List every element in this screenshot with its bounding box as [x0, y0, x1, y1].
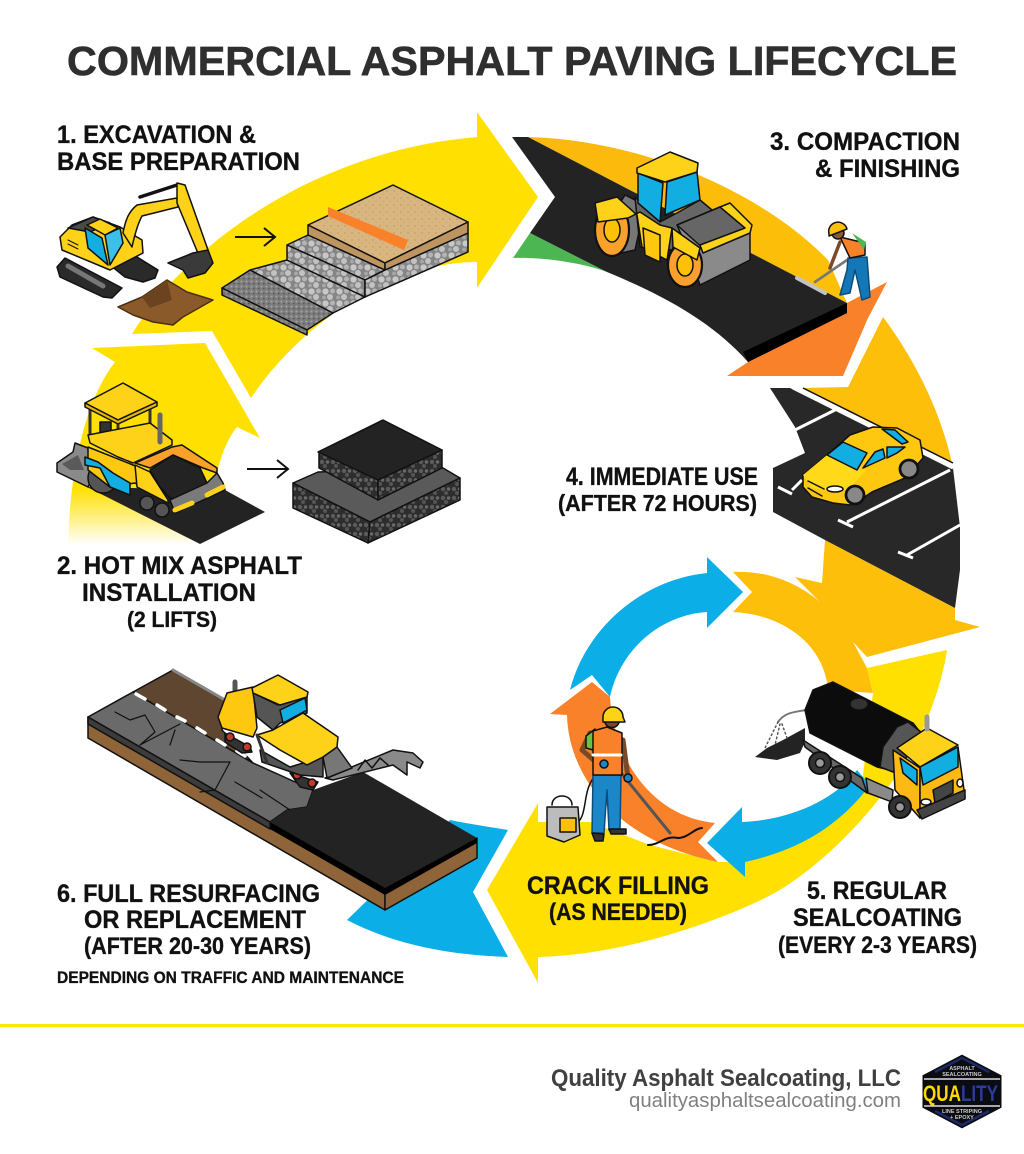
milling conveyor [325, 750, 423, 780]
label: crack filling [527, 872, 709, 926]
title: COMMERCIAL ASPHALT PAVING LIFECYCLE [67, 38, 957, 84]
icon: asphalt paver [57, 383, 265, 544]
label: crack filling: CRACK FILLING [527, 872, 709, 900]
arrow: step 2 yellow [68, 343, 260, 545]
logo: Quality badge: + EPOXY [950, 1115, 974, 1121]
footer: website: qualityasphaltsealcoating.com [629, 1090, 901, 1112]
label: step 4 [558, 463, 758, 516]
icon: base layers cross-section [222, 185, 468, 335]
icon: dirt pit [118, 280, 213, 325]
green accent [513, 233, 607, 272]
label: step 2 [57, 552, 302, 632]
label: step 5: (EVERY 2-3 YEARS) [778, 932, 977, 959]
label: step 2: 2. HOT MIX ASPHALT [57, 552, 302, 580]
label: step 1: BASE PREPARATION [57, 148, 300, 176]
icon: excavator [57, 183, 213, 325]
icon: road roller [595, 152, 752, 287]
amber band [528, 137, 847, 303]
label: step 6: DEPENDING ON TRAFFIC AND MAINTENANCE [57, 968, 404, 987]
icon: yellow car [803, 427, 923, 505]
icon: sealant jug [547, 807, 580, 842]
arrow: blue lower loop [707, 770, 870, 877]
label: step 2: (2 LIFTS) [127, 607, 217, 632]
arrow: step 1 yellow [132, 112, 538, 398]
label: step 6: 6. FULL RESURFACING [57, 880, 320, 908]
label: step 4: 4. IMMEDIATE USE [566, 463, 758, 491]
label: step 5: 5. REGULAR [807, 877, 947, 905]
label: step 5: SEALCOATING [793, 904, 962, 932]
road cracks [115, 712, 290, 810]
label: step 1: 1. EXCAVATION & [57, 121, 256, 149]
icon: two asphalt lifts [293, 420, 460, 543]
label: step 3 [770, 128, 960, 183]
label: step 2: INSTALLATION [82, 579, 256, 607]
icon: sealcoat tanker truck [755, 682, 965, 819]
arrow: big yellow sealcoating arrow [487, 650, 947, 983]
logo: Quality badge: LINE STRIPING [942, 1109, 982, 1115]
label: step 5 [778, 877, 977, 959]
orange arrowhead [727, 282, 887, 376]
label: crack filling: (AS NEEDED) [549, 899, 687, 926]
arrow: orange crack filling [550, 682, 718, 862]
label: step 6: (AFTER 20-30 YEARS) [84, 933, 311, 960]
label: step 6 [57, 880, 404, 987]
asphalt road [512, 137, 847, 362]
arrow: blue segment into resurfacing [347, 820, 508, 957]
label: step 1 [57, 121, 300, 176]
arrow: paver to lifts [247, 460, 288, 478]
label: step 3: 3. COMPACTION [770, 128, 960, 156]
parking lot [770, 388, 960, 608]
arrow: immediate use upper amber [803, 317, 952, 463]
icon: milling machine on cracked road [88, 670, 477, 910]
arrow: lower amber ring [733, 540, 980, 693]
arrow: excavation to layers [235, 228, 275, 246]
panel: compaction road arrow [512, 137, 887, 376]
logo: Quality badge: SEALCOATING [942, 1072, 982, 1078]
label: step 3: & FINISHING [815, 155, 960, 183]
logo: Quality badge: ASPHALT [949, 1066, 975, 1072]
footer: company name: Quality Asphalt Sealcoating, LLC [551, 1065, 901, 1092]
arrow: blue top loop [570, 557, 743, 697]
icon: crack filling worker [547, 707, 702, 845]
parking stripes [778, 388, 960, 558]
logo: Quality badge: QUALITY [923, 1081, 998, 1106]
logo: Quality badge [922, 1054, 1002, 1129]
label: step 4: (AFTER 72 HOURS) [558, 490, 757, 516]
label: step 6: OR REPLACEMENT [84, 906, 306, 934]
icon: worker with rake [797, 222, 870, 300]
